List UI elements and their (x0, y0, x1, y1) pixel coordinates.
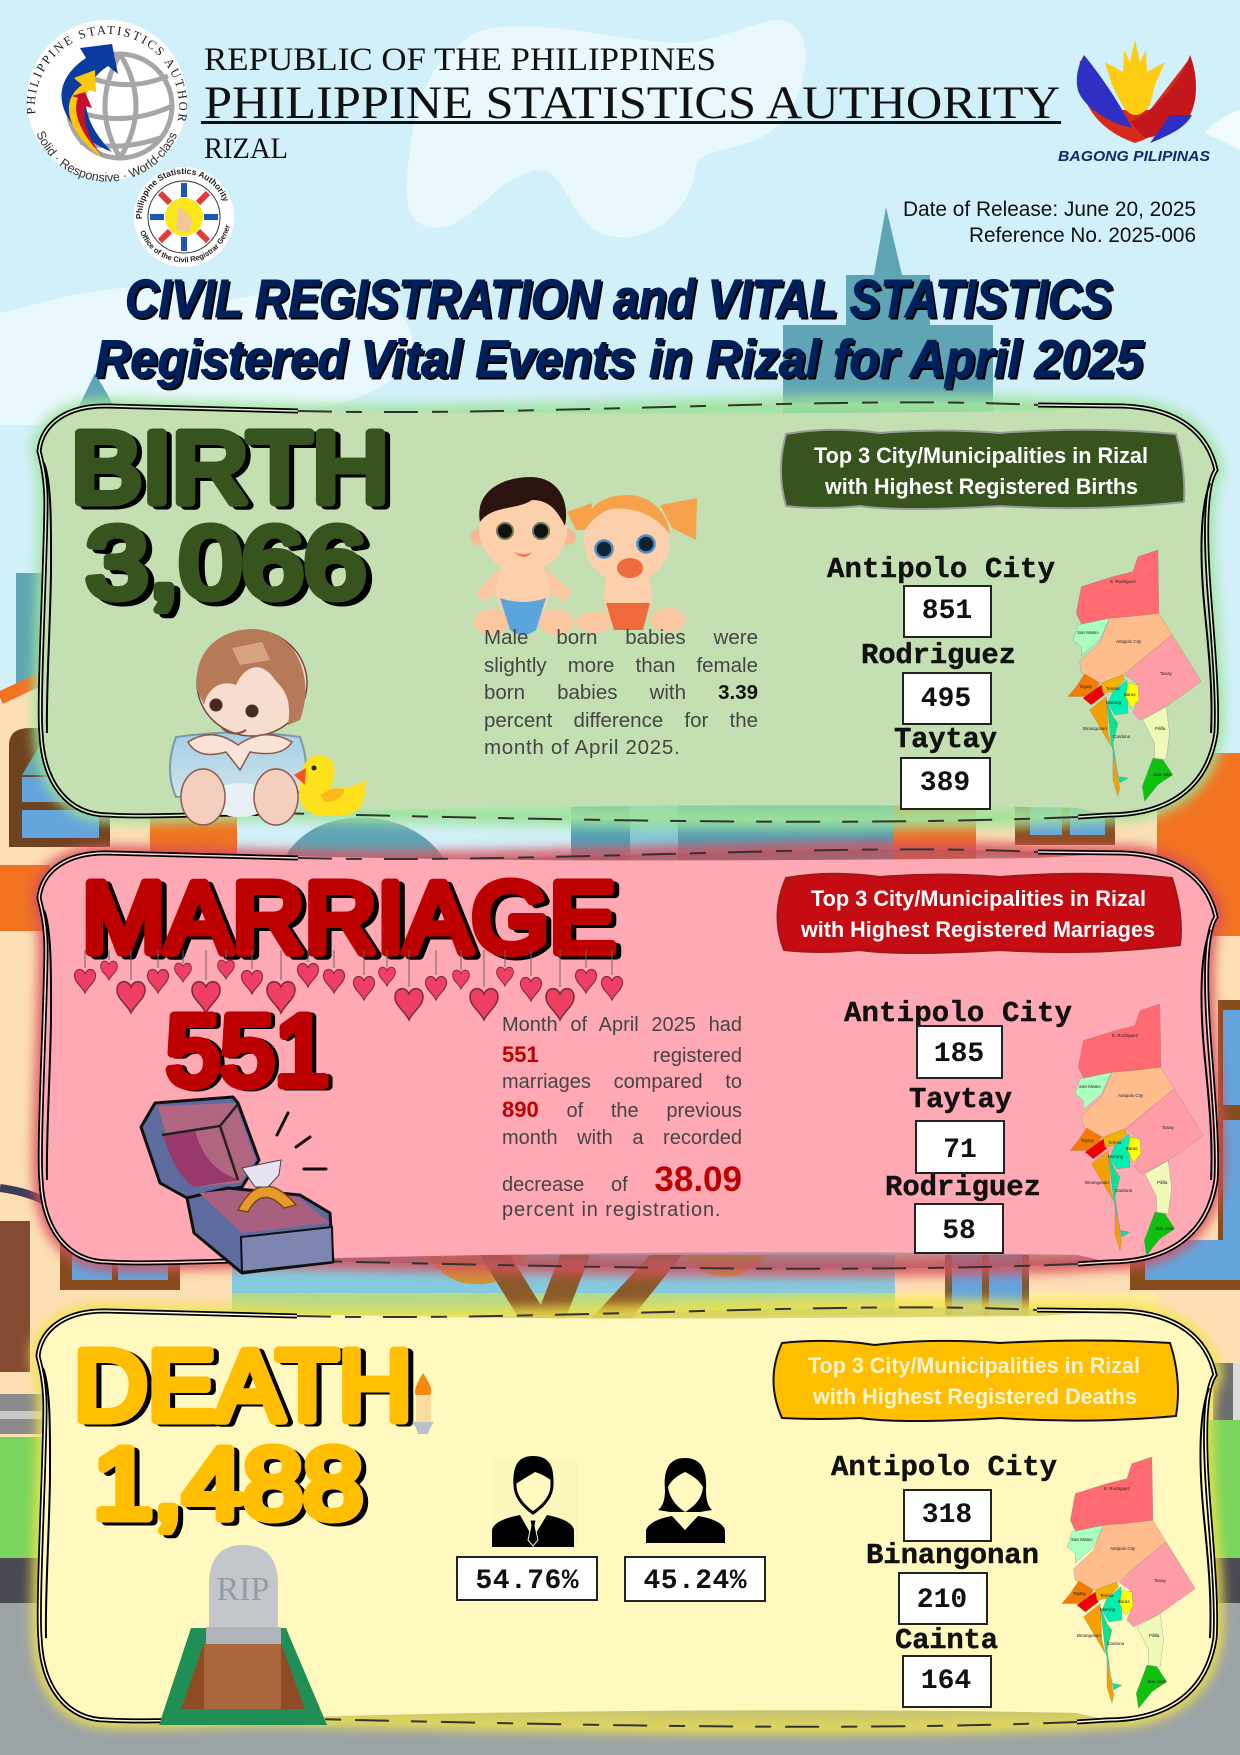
stat: marriages total: 551 (166, 995, 329, 1107)
map: Rizal province, marriages: Teresa (1108, 1140, 1122, 1145)
map: Rizal province, births: E. Rodriguez (1110, 579, 1137, 584)
map: Rizal province, births: Pililla (1155, 726, 1166, 731)
icon: rubber duck (294, 755, 365, 816)
banner: top 3 births: Top 3 City/Municipalities in Rizal (814, 443, 1148, 468)
map: Rizal province, deaths: San Mateo (1071, 1537, 1093, 1542)
map: Rizal province, births: Binangonan (1083, 726, 1107, 731)
ranking: top marriage cities (844, 997, 1072, 1253)
map: Rizal province, marriages: Morong (1108, 1154, 1124, 1159)
ranking: top birth cities (827, 553, 1055, 809)
icon: ring box (141, 1097, 333, 1273)
header: Bagong Pilipinas logo: BAGONG PILIPINAS (1058, 148, 1210, 165)
ranking: top marriage cities: 58 (942, 1216, 976, 1247)
ranking: top marriage cities: 71 (943, 1135, 977, 1166)
map: Rizal province, marriages: Jala-Jala (1155, 1226, 1173, 1231)
heading: MARRIAGE: MARRIAGE (82, 862, 616, 974)
map: Rizal province, deaths: Antipolo City (1110, 1546, 1136, 1551)
stat: male share: 54.76% (476, 1566, 579, 1597)
text: birth summary: Male born babies were (484, 626, 758, 649)
icon: tombstone: RIP (217, 1571, 269, 1608)
map: Rizal province, births: Cardona (1113, 734, 1131, 739)
main title: Registered Vital Events in Rizal for April 2025 (95, 330, 1144, 389)
map: Rizal province, births: San Mateo (1077, 630, 1099, 635)
map: Rizal province, deaths: Cardona (1107, 1641, 1125, 1646)
map: Rizal province, marriages: E. Rodriguez (1112, 1033, 1139, 1038)
header: Civil Registrar logo: Philippine Statistics Authority (136, 168, 228, 219)
icon: male silhouette (492, 1456, 578, 1547)
street (0, 1394, 50, 1434)
stat: births total: 3,066 (86, 507, 366, 619)
ranking: top birth cities: Antipolo City (827, 553, 1055, 586)
map: Rizal province, marriages: Tanay (1162, 1125, 1175, 1130)
banner: top 3 marriages: with Highest Registered Marriages (800, 917, 1155, 942)
banner: top 3 marriages (777, 874, 1181, 953)
map: Rizal province, births: Baras (1124, 692, 1136, 697)
ranking: top marriage cities: 185 (934, 1039, 984, 1070)
banner: top 3 deaths (774, 1340, 1178, 1421)
map: Rizal province, births: Morong (1106, 700, 1122, 705)
banner: top 3 births: with Highest Registered Births (824, 474, 1138, 499)
panel: death (38, 1307, 1216, 1727)
ranking: top death cities: Binangonan (866, 1539, 1039, 1572)
header: PSA logo: Solid · Responsive · World-class (37, 131, 177, 182)
map: Rizal province, deaths: E. Rodriguez (1104, 1486, 1131, 1491)
right house (1157, 753, 1240, 936)
map: Rizal province, births: Antipolo City (1116, 639, 1142, 644)
text: birth summary: percent difference for the (484, 709, 758, 732)
header: agency text: PHILIPPINE STATISTICS AUTHORITY (204, 77, 1060, 129)
ranking: top marriage cities: Rodriguez (885, 1171, 1041, 1204)
map: Rizal province, deaths: Baras (1118, 1599, 1130, 1604)
ranking: top birth cities: 495 (921, 684, 971, 715)
map: Rizal province, deaths: Pililla (1149, 1633, 1160, 1638)
text: marriage summary: 551 registered (502, 1042, 742, 1067)
decoration: hanging hearts (74, 950, 622, 1020)
heading: DEATH: DEATH (74, 1330, 412, 1442)
icon: female silhouette (646, 1458, 725, 1543)
stat: female share: 45.24% (644, 1566, 747, 1597)
map: Rizal province, births: Jala-Jala (1153, 772, 1171, 777)
ranking: top birth cities: Taytay (894, 723, 997, 756)
banner: top 3 marriages: Top 3 City/Municipalities in Rizal (811, 886, 1146, 911)
panel shape: birth (39, 402, 1217, 822)
map: Rizal province, marriages: San Mateo (1079, 1084, 1101, 1089)
text: marriage summary: percent in registration. (502, 1199, 721, 1221)
text: birth summary (484, 625, 758, 765)
ranking: top death cities: Antipolo City (831, 1451, 1057, 1484)
banner: top 3 deaths: Top 3 City/Municipalities in Rizal (808, 1353, 1140, 1378)
release date and reference number (903, 198, 1196, 247)
text: marriage summary: month with a recorded (502, 1127, 742, 1149)
left house (0, 675, 150, 1440)
centre scene (280, 818, 450, 870)
map: Rizal province, deaths (1062, 1457, 1195, 1708)
map: Rizal province, deaths: Taytay (1073, 1591, 1087, 1596)
ranking: top death cities: 164 (921, 1666, 971, 1697)
map: Rizal province, deaths: Tanay (1154, 1578, 1167, 1583)
icon: baby with pillow and duck (170, 629, 307, 825)
main title (95, 269, 1144, 389)
text: birth summary: slightly more than female (484, 654, 758, 677)
ranking: top birth cities: 851 (922, 596, 972, 627)
panel: birth (39, 402, 1217, 825)
map: Rizal province, deaths: Binangonan (1077, 1633, 1101, 1638)
ranking: top marriage cities: Antipolo City (844, 997, 1072, 1030)
map: Rizal province, marriages (1070, 1004, 1203, 1255)
map: Rizal province, marriages: Pililla (1157, 1180, 1168, 1185)
header: agency text: RIZAL (204, 132, 288, 165)
banner: top 3 births (781, 430, 1184, 509)
icon: tombstone (159, 1545, 327, 1725)
stat: deaths total: 1,488 (93, 1428, 363, 1540)
map: Rizal province, marriages: Binangonan (1085, 1180, 1109, 1185)
tower (783, 207, 993, 420)
icon: candle (412, 1373, 434, 1434)
header: PSA logo (26, 20, 188, 182)
banner: top 3 deaths: with Highest Registered Deaths (812, 1384, 1137, 1409)
ranking: top birth cities: Rodriguez (861, 639, 1016, 672)
text: marriage summary: decrease of 38.09 (502, 1160, 742, 1199)
panel shape: marriage (39, 849, 1217, 1269)
map: Rizal province, marriages: Antipolo City (1118, 1093, 1144, 1098)
ranking: top death cities (831, 1451, 1057, 1707)
release date and reference number: Date of Release: June 20, 2025 (903, 198, 1196, 221)
map: Rizal province, births: Tanay (1160, 671, 1173, 676)
stat: female share (625, 1557, 765, 1601)
text: marriage summary: Month of April 2025 had (502, 1014, 742, 1036)
map: Rizal province, deaths: Morong (1100, 1607, 1116, 1612)
ranking: top death cities: Cainta (895, 1624, 998, 1657)
header: agency text: REPUBLIC OF THE PHILIPPINES (204, 42, 716, 78)
map: Rizal province, marriages: Cardona (1115, 1188, 1133, 1193)
map: Rizal province, marriages: Taytay (1081, 1138, 1095, 1143)
header: Civil Registrar logo (134, 167, 234, 267)
map: Rizal province, births: Teresa (1106, 686, 1120, 691)
icon: boy baby (470, 477, 576, 635)
ranking: top marriage cities: Taytay (909, 1083, 1012, 1116)
ranking: top birth cities: 389 (920, 768, 970, 799)
icon: girl baby (567, 495, 697, 633)
text: marriage summary (502, 1010, 742, 1235)
map: Rizal province, births: Taytay (1079, 684, 1093, 689)
text: marriage summary: 890 of the previous (502, 1097, 742, 1122)
ranking: top death cities: 318 (922, 1500, 972, 1531)
text: birth summary: month of April 2025. (484, 736, 680, 759)
map: Rizal province, marriages: Baras (1126, 1146, 1138, 1151)
header: agency text (201, 42, 1061, 165)
release date and reference number: Reference No. 2025-006 (969, 224, 1196, 247)
panel shape: death (38, 1307, 1216, 1727)
header: Bagong Pilipinas logo (1058, 40, 1210, 165)
panel: marriage (39, 849, 1217, 1273)
map: Rizal province, births (1068, 550, 1201, 801)
text: marriage summary: marriages compared to (502, 1071, 742, 1093)
ranking: top death cities: 210 (917, 1585, 967, 1616)
text: birth summary: born babies with 3.39 (484, 681, 758, 704)
stat: male share (457, 1557, 597, 1600)
map: Rizal province, deaths: Teresa (1100, 1593, 1114, 1598)
heading: BIRTH: BIRTH (71, 412, 389, 524)
map: Rizal province, deaths: Jala-Jala (1147, 1679, 1165, 1684)
